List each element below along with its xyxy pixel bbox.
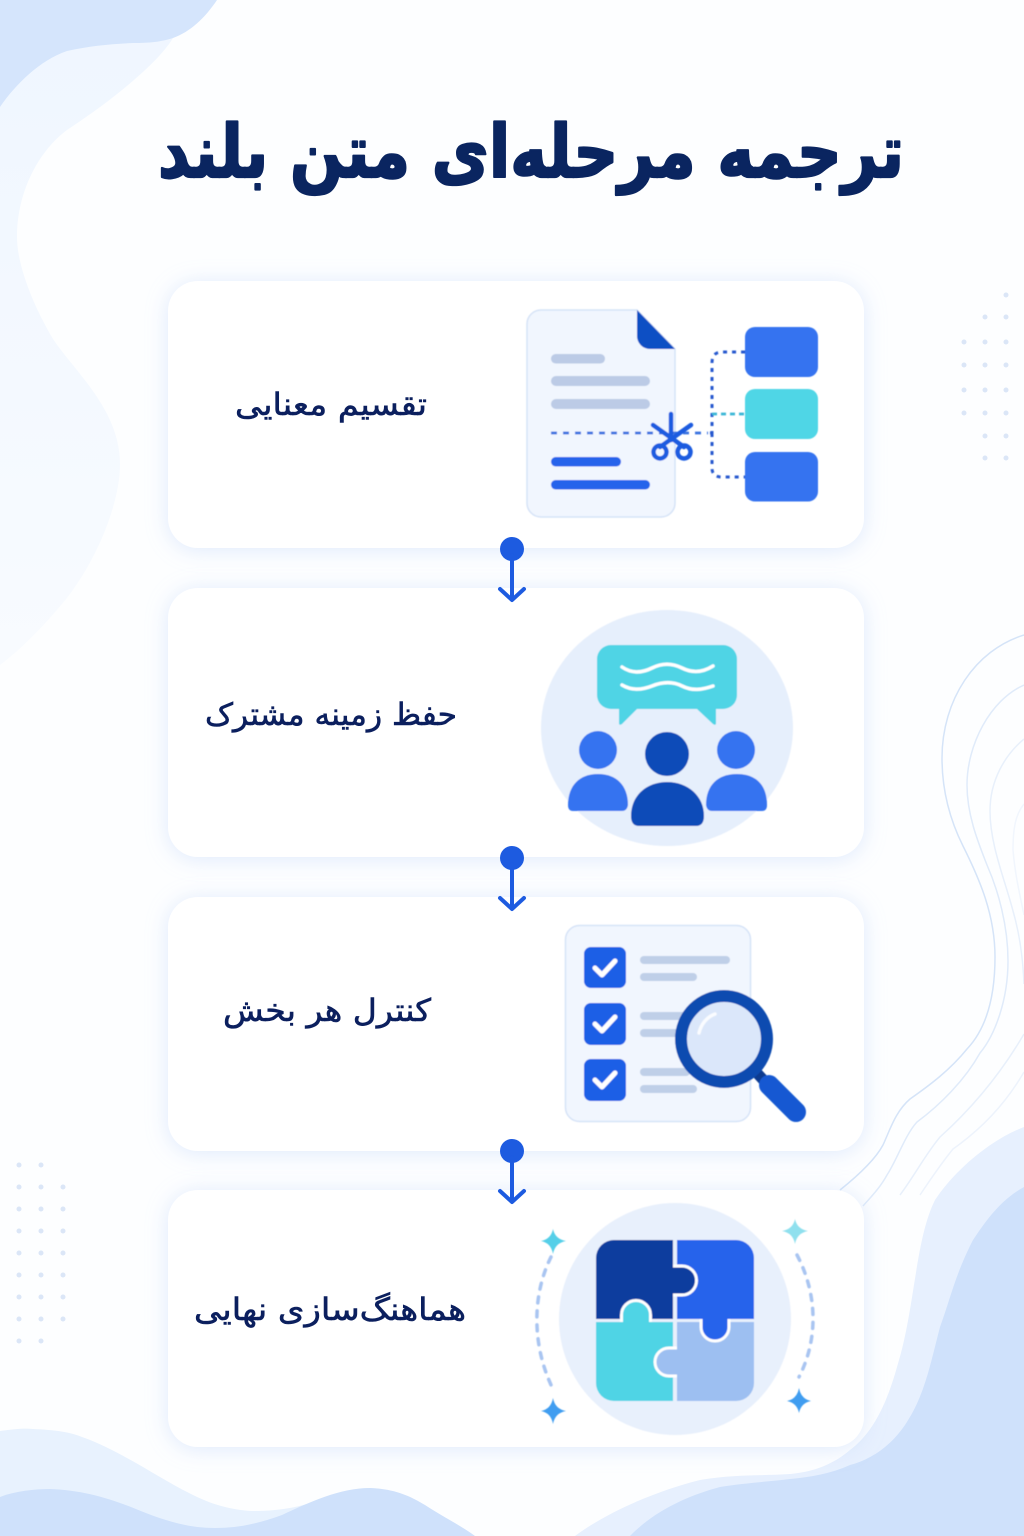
step 1 label: تقسیم معنایی [235, 387, 427, 423]
arrow: step 3 to step 4 [500, 1139, 524, 1202]
icon: team with speech bubble [541, 610, 793, 846]
arrow: step 1 to step 2 [500, 537, 524, 600]
step 3 label: کنترل هر بخش [223, 993, 431, 1029]
decorative dots: bottom left [16, 1162, 66, 1344]
icon: document split by scissors [527, 310, 818, 517]
panel: step 2 card [168, 588, 864, 857]
panel: step 1 card [168, 281, 864, 548]
arrow: step 2 to step 3 [500, 846, 524, 909]
panel: step 3 card [168, 897, 864, 1151]
icon: checklist with magnifier [566, 926, 796, 1122]
title: ترجمه مرحله‌ای متن بلند [158, 110, 904, 195]
icon: puzzle with sparkles [537, 1203, 813, 1435]
decorative dots: top right [962, 292, 1008, 460]
step 2 label: حفظ زمینه مشترک [205, 697, 457, 733]
step 4 label: هماهنگ‌سازی نهایی [194, 1292, 466, 1328]
panel: step 4 card [168, 1190, 864, 1447]
